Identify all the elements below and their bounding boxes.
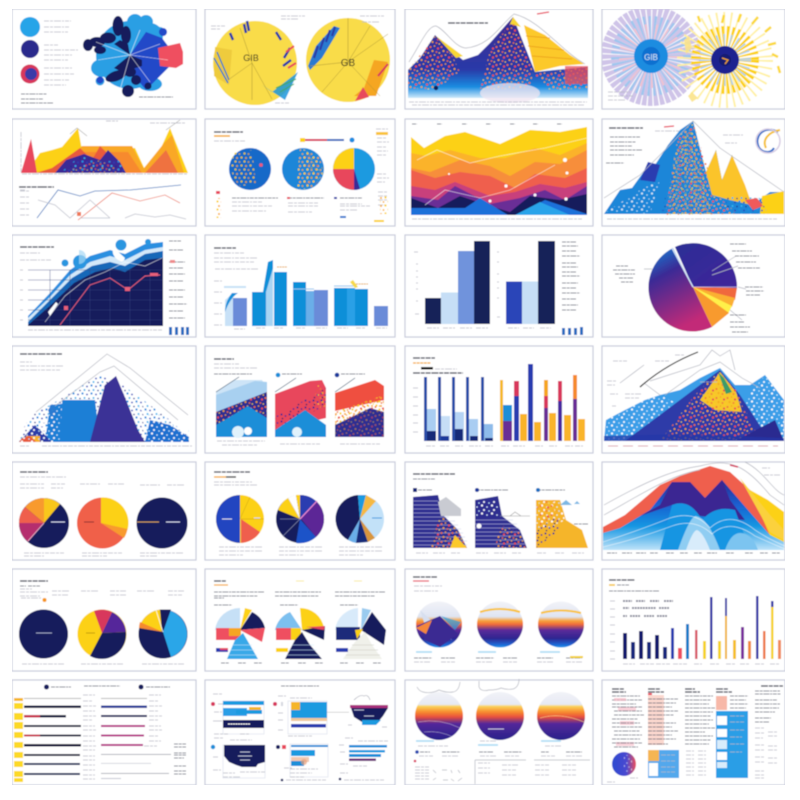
stacked wave chart xyxy=(411,127,587,215)
globe two xyxy=(477,602,523,648)
axis labels xyxy=(412,218,582,220)
pie one xyxy=(19,498,69,548)
callout text xyxy=(211,16,384,103)
slope one xyxy=(413,495,467,548)
pie left xyxy=(213,21,298,105)
icon: blue circle xyxy=(20,17,40,37)
annotation xyxy=(730,465,738,467)
bar group right xyxy=(500,364,585,441)
axis labels xyxy=(610,601,780,664)
mountain area xyxy=(408,17,588,103)
side text xyxy=(562,242,580,310)
axis labels xyxy=(20,270,162,330)
panel: globes row A xyxy=(405,569,593,671)
lower text xyxy=(415,763,576,779)
large text xyxy=(623,601,673,616)
panel: text columns xyxy=(602,680,785,785)
pie label: GB xyxy=(341,58,356,69)
heading xyxy=(413,358,463,373)
annotation text xyxy=(607,355,718,406)
caption text xyxy=(608,92,634,100)
heading xyxy=(214,581,385,598)
globe one xyxy=(416,602,462,648)
card C xyxy=(348,696,388,727)
footnote xyxy=(607,778,638,782)
panel: horizontal bar list xyxy=(12,680,196,785)
heading xyxy=(413,577,442,591)
pie peak C xyxy=(335,605,386,663)
value labels xyxy=(277,267,368,284)
panel: speckled range with arrow xyxy=(602,346,785,453)
heading xyxy=(214,359,258,368)
top legend xyxy=(44,684,170,690)
burst right xyxy=(698,14,780,84)
caption text xyxy=(416,651,560,653)
pie two xyxy=(78,610,126,659)
area chart xyxy=(28,239,163,326)
globe three xyxy=(538,602,584,648)
chart: red slope xyxy=(275,373,326,444)
text block xyxy=(609,127,643,129)
card F xyxy=(339,738,388,780)
chart heading xyxy=(19,186,54,188)
speckled mountain xyxy=(604,368,784,441)
panel: radial blob map xyxy=(12,9,196,109)
axis labels xyxy=(409,102,587,105)
bar chart left xyxy=(425,241,490,324)
panel: layered wave mountain xyxy=(602,462,785,560)
caption text xyxy=(21,94,173,103)
small bars xyxy=(169,327,189,335)
panel: three slope charts xyxy=(205,346,395,453)
column three xyxy=(685,689,715,775)
heading xyxy=(609,580,659,591)
bar chart xyxy=(224,260,388,326)
chart: blue slope xyxy=(214,374,267,445)
slope three xyxy=(536,488,588,548)
title text xyxy=(448,22,488,24)
peak chart xyxy=(604,121,784,215)
chart: orange slope xyxy=(335,373,384,444)
burst label: GIB xyxy=(644,53,658,62)
panel: speckled peak xyxy=(602,119,785,226)
stacked area chart xyxy=(21,120,188,173)
bar chart right xyxy=(506,241,555,324)
panel: dark area chart xyxy=(12,235,196,337)
pie A xyxy=(216,495,264,543)
bar chart xyxy=(623,596,781,659)
panel: paired bars navy xyxy=(405,235,593,337)
dotted mountain xyxy=(19,375,189,442)
pie peak B xyxy=(275,605,325,663)
blob chart xyxy=(83,14,183,97)
bars right xyxy=(101,698,171,779)
axis labels xyxy=(214,281,387,329)
outline lines xyxy=(409,14,585,64)
heading xyxy=(20,247,54,260)
outline lines xyxy=(620,350,760,395)
axis labels xyxy=(20,445,192,447)
panel: three pies row B xyxy=(205,462,395,560)
icon: indigo circle xyxy=(21,40,39,58)
axis labels xyxy=(607,218,777,220)
pie B xyxy=(276,495,324,543)
heading xyxy=(20,354,64,370)
panel: twin starbursts xyxy=(602,9,785,109)
axis labels xyxy=(414,252,551,328)
top connectors xyxy=(417,679,519,693)
panel: large pie xyxy=(602,235,785,337)
column one xyxy=(612,689,644,747)
globe two xyxy=(476,692,524,740)
axis labels xyxy=(416,552,584,554)
panel: three circles xyxy=(205,119,395,226)
panel: tall bars xyxy=(405,346,593,453)
column five xyxy=(755,686,783,778)
right legend xyxy=(376,129,389,205)
caption text xyxy=(24,553,184,556)
pie label: GIB xyxy=(243,53,259,63)
wave chart xyxy=(603,466,785,550)
panel: blue dotted peak xyxy=(12,346,196,453)
circle: yellow speckle xyxy=(282,148,324,190)
outline lines xyxy=(604,462,784,515)
title xyxy=(281,685,319,687)
pie chart xyxy=(333,148,375,190)
card A xyxy=(211,694,264,734)
pie right xyxy=(306,18,390,102)
panel: thin bars xyxy=(602,569,785,671)
column four xyxy=(716,689,748,778)
card D xyxy=(211,738,265,778)
heading xyxy=(214,248,259,269)
pie three xyxy=(136,498,188,548)
panel: area and line chart xyxy=(12,119,196,226)
logo swirl xyxy=(756,129,780,153)
panel: yellow pies xyxy=(205,9,395,109)
line chart xyxy=(20,185,186,220)
caption bars xyxy=(416,741,561,745)
icon: orange badge xyxy=(42,598,46,602)
panel: three pies row A xyxy=(12,462,196,560)
bottom text xyxy=(232,197,362,199)
caption text xyxy=(219,547,383,555)
pie two xyxy=(77,497,129,548)
globe three xyxy=(537,692,585,740)
pale petals between xyxy=(684,36,698,102)
bars left xyxy=(24,698,81,775)
yellow tags xyxy=(14,698,23,782)
outline lines xyxy=(36,354,188,420)
axis labels xyxy=(607,552,780,554)
circle chart xyxy=(612,752,636,776)
heading xyxy=(20,581,184,598)
panel: globes row B xyxy=(405,679,593,785)
caption text xyxy=(22,663,184,665)
slope two xyxy=(475,488,530,548)
panel: blue cards grid xyxy=(205,680,395,785)
column two xyxy=(648,689,679,778)
annotation xyxy=(537,12,549,14)
panel: three pies row C xyxy=(12,569,196,671)
panel: dotted slopes xyxy=(405,462,593,560)
pie chart xyxy=(648,243,737,332)
annotation xyxy=(664,126,674,127)
panel: stacked waves xyxy=(405,119,593,226)
legend text xyxy=(44,21,78,85)
heading xyxy=(413,474,565,492)
side text xyxy=(169,241,187,318)
heading xyxy=(214,472,258,485)
panel: mountain speckle chart xyxy=(405,9,593,109)
row text xyxy=(83,695,162,779)
legends xyxy=(414,750,582,762)
arrow xyxy=(640,352,698,387)
small icons xyxy=(433,770,462,781)
card E xyxy=(276,744,328,781)
small bars xyxy=(562,327,583,335)
legend bar xyxy=(300,138,354,142)
heading xyxy=(214,132,246,141)
axis labels xyxy=(608,445,778,447)
pie C xyxy=(336,495,384,543)
pie one xyxy=(19,610,68,658)
callouts xyxy=(644,256,746,320)
pie three xyxy=(138,609,188,658)
axis labels xyxy=(413,388,583,446)
yellow top tags xyxy=(296,580,362,582)
top labels xyxy=(412,123,562,125)
burst left xyxy=(626,31,676,81)
icon: red and blue circle xyxy=(20,64,40,84)
axis labels xyxy=(21,121,187,174)
card B xyxy=(273,696,349,736)
pie peak A xyxy=(214,605,265,663)
circle: blue speckle xyxy=(229,148,271,190)
outline lines xyxy=(604,121,784,198)
bar group left xyxy=(424,377,493,441)
heading xyxy=(20,472,185,488)
panel: pie peaks xyxy=(205,569,395,671)
panel: blue bars xyxy=(205,235,395,337)
globe one xyxy=(415,692,463,740)
